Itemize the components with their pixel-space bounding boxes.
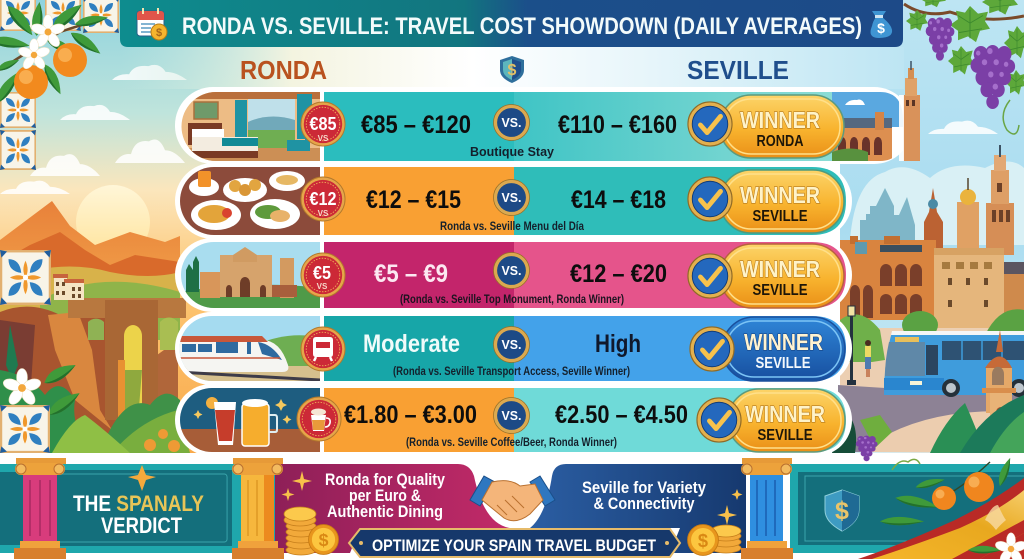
right scene: Seville [832,0,1024,461]
prices row 5: €2.50 – €4.50 [555,401,688,429]
row sublabels: (Ronda vs. Seville Coffee/Beer, Ronda Winner) [406,437,617,449]
prices row 3 [374,260,667,288]
price panel right [514,92,844,161]
green foliage [0,370,95,453]
tiles [0,0,36,31]
greenery [840,314,885,362]
left verdict panel [0,464,280,553]
navy panel [530,464,746,553]
price panel right [514,167,846,235]
icon: central shield [500,56,524,83]
grape vine [904,4,1024,19]
prices row 1: €85 – €120 [361,111,471,139]
price panel right [514,242,846,308]
magenta panel: Authentic Dining [327,503,443,521]
icon: calendar with coin: $ [156,27,162,39]
VS badge row 1 [493,104,530,141]
prices row 2 [366,186,666,214]
winner badge row 5: WINNER [745,401,825,427]
medal: coffee icon [297,397,341,441]
medal: 12 euro: VS [318,209,329,218]
slogan banner [349,529,680,557]
row 4: transport access [175,312,852,385]
right teal panel [790,464,1024,553]
magenta panel: per Euro & [349,487,421,505]
seville verdict text: Seville for Variety [582,479,707,497]
ground [840,328,1024,410]
tower [899,61,920,161]
prices row 5: €1.80 – €3.00 [344,401,477,429]
pillar: gold [232,458,284,559]
small tower [982,330,1016,423]
sun [76,185,150,259]
pillar: blue [741,458,793,559]
price panel left [324,167,514,235]
ronda verdict text: Ronda for Quality [325,471,446,489]
train image [178,316,322,381]
row sublabels: Boutique Stay [470,144,555,159]
right teal panel: $ [835,497,849,525]
row 3: top monument [175,238,852,312]
price panel left [324,316,514,381]
magenta panel [275,464,510,553]
row sublabels: (Ronda vs. Seville Transport Access, Seville Winner) [393,366,630,378]
winner badge row 1: RONDA [756,133,804,150]
spanish ribbon and oranges [858,456,1024,559]
prices row 1: €110 – €160 [558,111,677,139]
left verdict panel: VERDICT [101,513,182,538]
prices row 2: €14 – €18 [571,186,666,214]
title text: RONDA VS. SEVILLE: TRAVEL COST SHOWDOWN (DAILY AVERAGES) [182,13,862,40]
heading: Seville: SEVILLE [687,55,789,85]
medal: 5 euro: €5 [313,263,331,283]
winner badge row 2: SEVILLE [752,208,808,225]
drinks image [178,388,322,452]
sparkles [282,471,312,501]
row sublabels: Ronda vs. Seville Menu del Día [440,221,585,233]
VS badge row 3: VS. [502,263,522,278]
prices row 3: €12 – €20 [570,260,667,288]
prices row 5 [344,401,688,429]
bedroom image [180,92,322,161]
monument image [178,242,322,308]
flower [2,368,42,407]
Giralda [986,145,1014,255]
winner badge row 3: WINNER [740,256,820,282]
medal: 85 euro [301,102,345,146]
white houses [54,276,84,300]
blue bus [884,331,1024,397]
shield [825,490,859,531]
Seville building image [832,92,907,161]
sparkles [717,489,742,525]
row 1: boutique stay [175,61,920,164]
VS badge row 5 [493,397,530,434]
medal: 12 euro: €12 [310,189,336,209]
pillar: pink [14,458,66,559]
medal: train icon [301,327,345,371]
row sublabels [393,144,630,449]
icon: calendar with coin [137,8,167,40]
slogan banner: OPTIMIZE YOUR SPAIN TRAVEL BUDGET [372,536,657,555]
winner badge row 2: WINNER [740,182,820,208]
price panel right [514,316,846,381]
brown tower [924,188,943,255]
VS badge row 2: VS. [502,190,522,205]
VS badge row 3 [493,252,530,289]
orange branch [0,0,109,106]
row 2: menu del dia [175,163,852,239]
price panel left [324,242,514,308]
navy panel: & Connectivity [594,495,695,513]
VS badge row 4 [493,326,530,363]
person [865,340,871,377]
winner badge row 4: SEVILLE [756,355,811,372]
tan tower [934,248,1024,337]
street lamp [847,306,856,385]
winner badge row 1 [688,95,844,158]
VS badge row 5: VS. [502,408,522,423]
bottom plants [930,403,985,453]
cliffs [0,307,125,453]
VS badge row 2 [493,179,530,216]
plaza building [840,236,936,320]
winner badge row 4 [690,317,845,381]
labels row 4: High [595,330,641,358]
labels row 4 [363,330,641,358]
title banner [120,0,903,47]
icon: money bag: $ [877,20,885,36]
plates image [178,167,322,235]
winner badge row 5: SEVILLE [758,427,813,444]
prices row 2: €12 – €15 [366,186,461,214]
heading band background [120,47,904,89]
icon: money bag [871,11,892,38]
domed tower [957,202,979,257]
row 5: coffee and beer [175,384,852,456]
icon: handshake [470,476,555,521]
winner badge row 3: SEVILLE [752,282,808,299]
row sublabels: (Ronda vs. Seville Top Monument, Ronda Winner) [400,294,624,306]
footer band [0,456,1024,559]
price panel right [514,388,846,452]
winner badge row 3 [688,244,844,308]
winner badge row 1: WINNER [740,107,820,133]
VS badge row 4: VS. [502,337,522,352]
blue skyline [860,188,915,240]
VS badge row 1: VS. [502,115,522,130]
bridge [68,298,186,420]
verdict title: THE SPANALY [73,491,204,516]
medal: 85 euro: VS [318,134,329,143]
coins left [284,507,338,555]
coins right [688,525,741,555]
prices row 3: €5 – €9 [374,260,448,288]
prices row 1 [361,111,677,139]
winner badge row 4: WINNER [744,329,823,355]
heading: Ronda: RONDA [240,55,327,85]
medal: 85 euro: €85 [310,114,336,134]
left scene: Ronda landscape [0,0,330,453]
winner badge row 2 [688,170,844,233]
icon: central shield: $ [508,62,517,79]
medal: 12 euro [301,177,345,221]
sparkle [128,465,156,491]
medal: 5 euro [301,253,345,297]
labels row 4: Moderate [363,330,460,358]
mountains [0,201,180,300]
price panel left [324,388,514,452]
price panel left [324,92,514,161]
winner badge row 5 [697,389,845,452]
medal: 5 euro: VS [317,282,328,291]
